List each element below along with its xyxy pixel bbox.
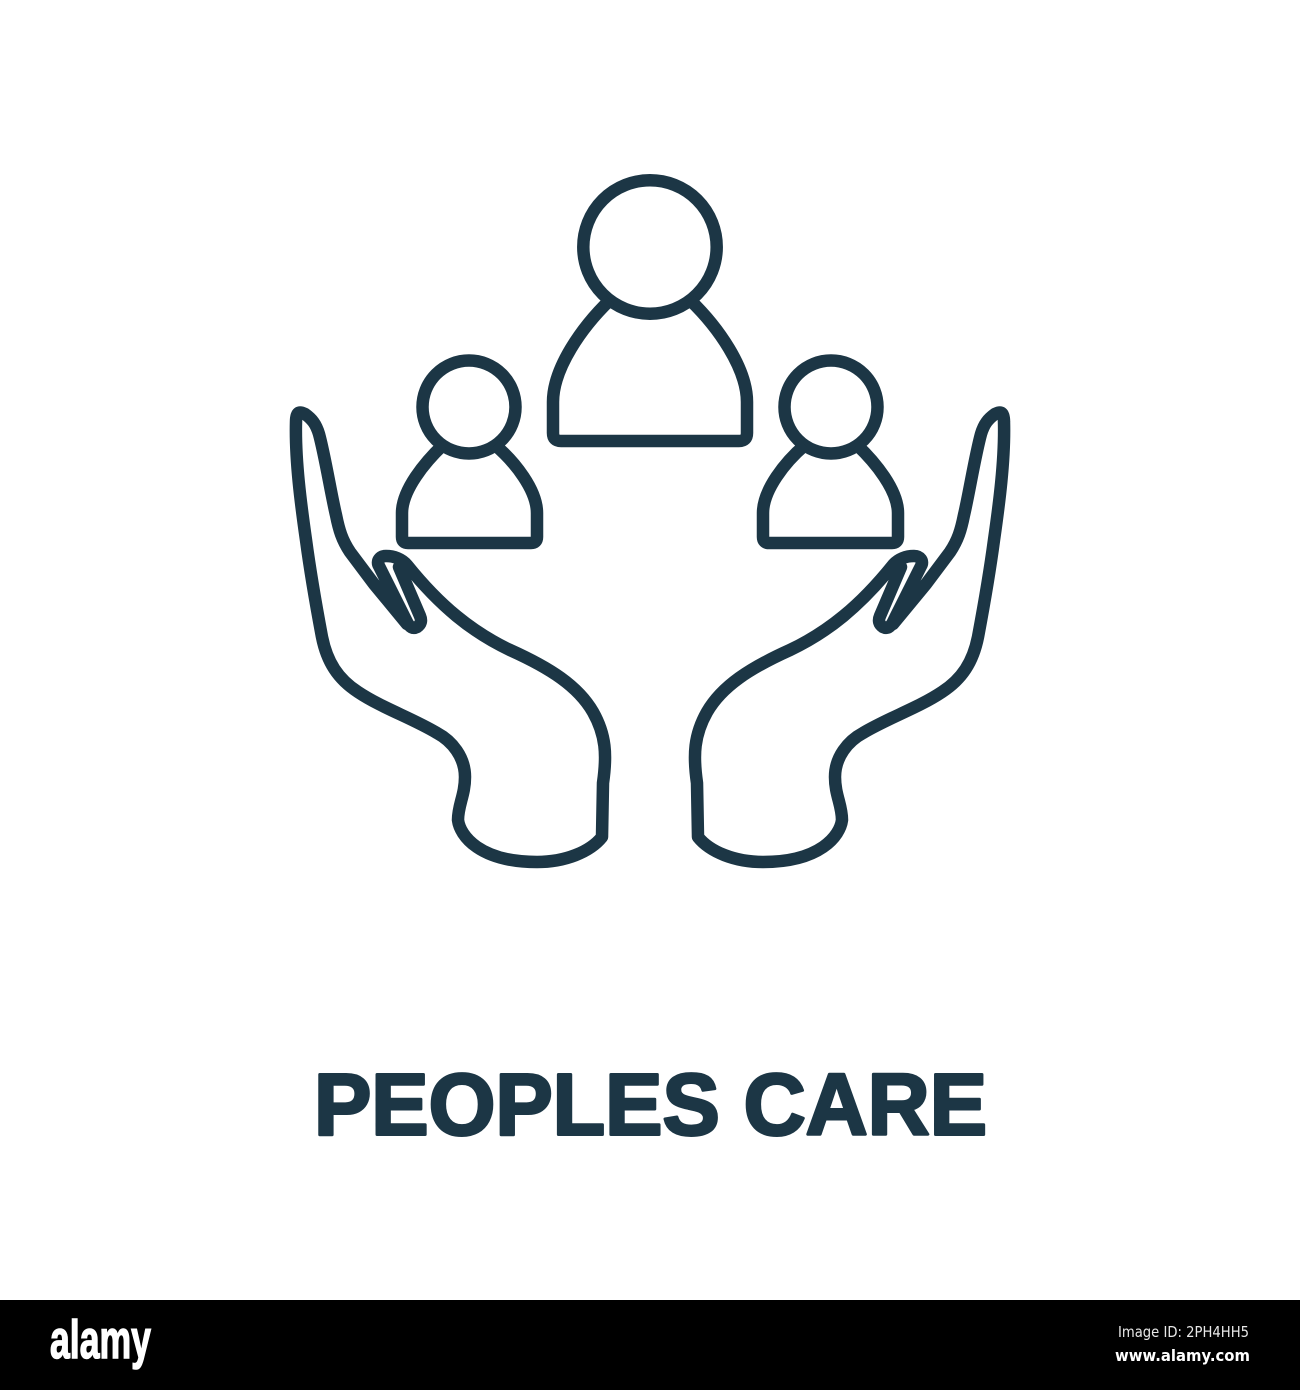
image id: Image ID: 2PH4HH5 [1118, 1323, 1249, 1341]
title: PEOPLES CARE [314, 1056, 987, 1154]
icon: right person [763, 360, 898, 543]
logo: alamy: alamy [50, 1310, 151, 1370]
icon: left person [402, 360, 537, 543]
website: www.alamy.com [1115, 1346, 1250, 1365]
footer bar [0, 1300, 1300, 1390]
icon: left hand [296, 413, 605, 862]
icon: centre person [553, 180, 747, 441]
icon: right hand [695, 413, 1004, 862]
icon: peoples care [296, 180, 1004, 862]
